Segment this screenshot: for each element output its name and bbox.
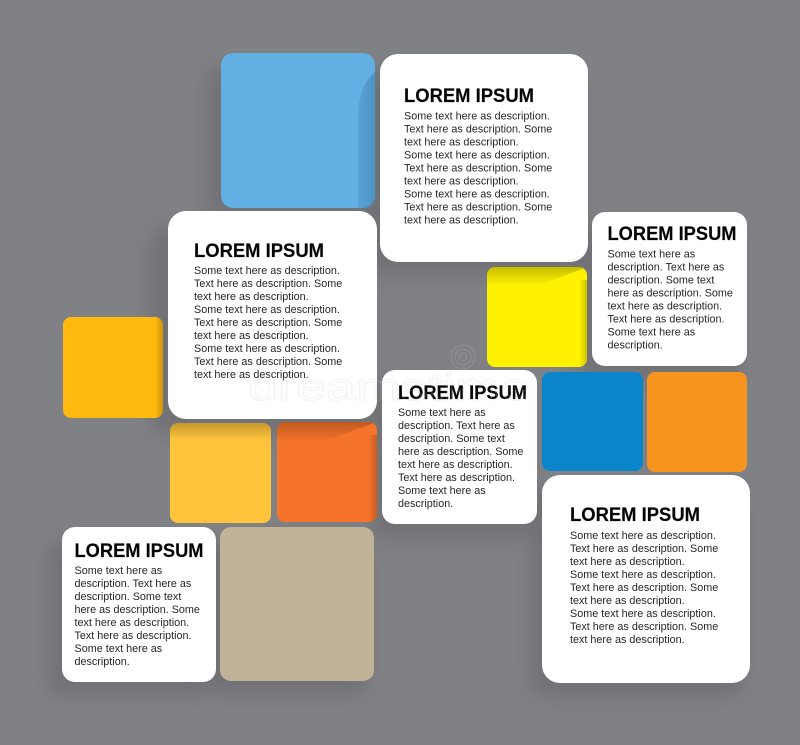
text block: text here as description.	[404, 176, 519, 188]
fold shading: orange-red square	[277, 422, 377, 523]
text block: Text here as description. Some	[404, 162, 552, 174]
text block: Some text here as description.	[404, 188, 550, 200]
text block: description.	[608, 340, 663, 352]
heading: LOREM IPSUM	[398, 383, 527, 404]
text block: text here as description.	[194, 330, 309, 342]
text block: text here as description.	[570, 634, 685, 646]
text block: Text here as description. Some	[404, 202, 552, 214]
text block: Some text here as	[608, 248, 696, 260]
text block: Some text here as	[398, 485, 486, 497]
panel: amber square left	[63, 317, 163, 418]
text block: Text here as description. Some	[570, 621, 718, 633]
text block: Text here as description. Some	[194, 356, 342, 368]
panel: text card top	[380, 54, 588, 262]
fold shading: blue square	[358, 72, 375, 208]
text block	[404, 110, 552, 226]
panel: blue square right	[542, 372, 643, 471]
text block: here as description. Some	[608, 288, 733, 300]
panel: light amber square	[170, 423, 271, 523]
text block: Text here as description. Some	[194, 317, 342, 329]
heading: LOREM IPSUM	[570, 505, 700, 526]
text block: Some text here as	[74, 643, 163, 655]
panel: text card lower right	[542, 475, 750, 683]
heading: LOREM IPSUM	[194, 241, 324, 262]
panel: yellow square	[487, 267, 587, 368]
text block: text here as description.	[608, 300, 722, 312]
text block: description.	[74, 656, 130, 668]
text block: Some text here as description.	[570, 569, 716, 581]
text block: Text here as description.	[74, 630, 192, 642]
text block: Text here as description. Some	[570, 543, 718, 555]
fold shading: light amber square	[170, 423, 271, 438]
text block: text here as description.	[570, 595, 685, 607]
text block: text here as description.	[404, 136, 519, 148]
text block: Text here as description. Some	[404, 124, 552, 136]
text block: here as description. Some	[398, 446, 523, 458]
panel: text card left	[168, 211, 377, 419]
text block: text here as description.	[74, 617, 189, 629]
text block: Text here as description.	[398, 472, 515, 484]
heading: LOREM IPSUM	[74, 541, 204, 562]
text block: Some text here as description.	[570, 530, 716, 542]
text block	[194, 265, 342, 381]
text block: Some text here as description.	[404, 110, 550, 122]
text block: description. Text here as	[608, 262, 725, 274]
text block: description. Text here as	[398, 420, 515, 432]
text block: text here as description.	[404, 214, 519, 226]
text block: here as description. Some	[74, 604, 200, 616]
panel shadows	[48, 67, 744, 697]
text block: description. Some text	[398, 433, 505, 445]
text block: Some text here as	[398, 407, 486, 419]
text block: Some text here as description.	[194, 304, 340, 316]
text block: Some text here as description.	[194, 343, 340, 355]
panel: orange square right	[647, 372, 747, 472]
text block: text here as description.	[194, 291, 309, 303]
text block: description. Some text	[608, 274, 714, 286]
text block: Some text here as description.	[404, 150, 550, 162]
text block: Text here as description.	[608, 314, 725, 326]
text block	[74, 565, 200, 668]
text block: description.	[398, 498, 453, 510]
watermark: dreamstime	[248, 367, 530, 409]
heading: LOREM IPSUM	[608, 224, 736, 245]
text block: Some text here as	[74, 565, 163, 577]
text block: Some text here as description.	[570, 608, 716, 620]
panel: blue square	[221, 53, 375, 208]
text block	[398, 407, 523, 510]
panel: orange-red square	[277, 422, 377, 523]
panel: text card centre	[382, 370, 537, 524]
text block: Some text here as	[608, 326, 696, 338]
panel: tan square	[220, 527, 374, 681]
text block: Text here as description. Some	[570, 582, 718, 594]
text block: description. Text here as	[74, 578, 192, 590]
fold shading: yellow square	[487, 267, 587, 368]
panel: text card lower left	[62, 527, 216, 682]
text block: description. Some text	[74, 591, 181, 603]
text block	[608, 248, 733, 352]
text block: text here as description.	[570, 556, 685, 568]
text block: text here as description.	[194, 369, 309, 381]
watermark	[248, 345, 530, 409]
text block	[570, 530, 718, 646]
heading: LOREM IPSUM	[404, 86, 534, 107]
text block: text here as description.	[398, 459, 513, 471]
text block: Some text here as description.	[194, 265, 340, 277]
panel: text card upper right	[592, 212, 747, 366]
fold shading: amber square	[156, 318, 163, 418]
text block: Text here as description. Some	[194, 278, 342, 290]
